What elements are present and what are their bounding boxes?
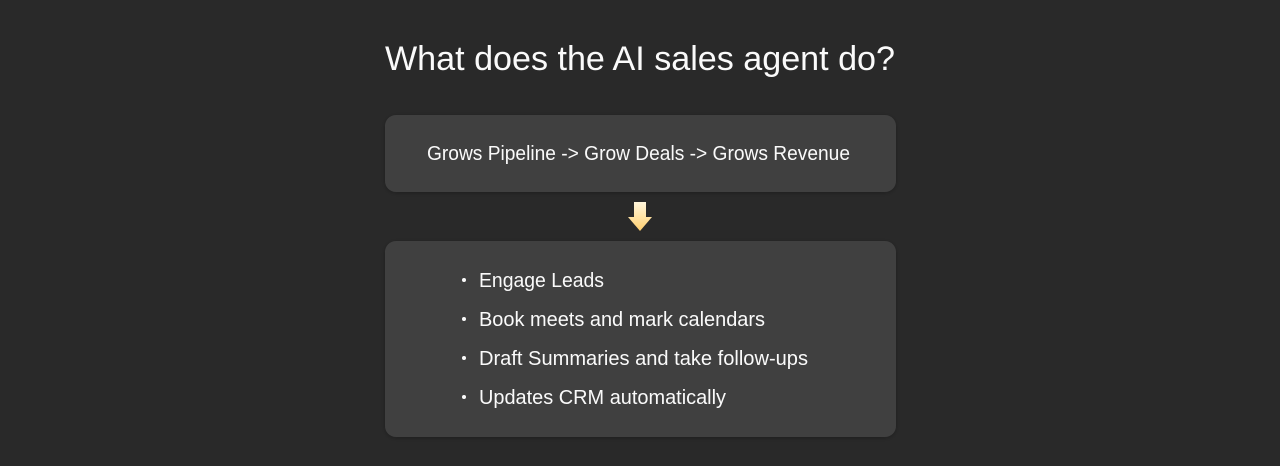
panel: agent tasks bbox=[385, 241, 896, 437]
list item: engage leads: Engage Leads bbox=[479, 270, 604, 292]
list item: updates CRM: Updates CRM automatically bbox=[479, 387, 726, 409]
title: What does the AI sales agent do? bbox=[385, 40, 895, 78]
list item: book meets: Book meets and mark calendars bbox=[479, 309, 765, 331]
icon: down arrow bbox=[628, 202, 652, 231]
panel: outcome flow bbox=[385, 115, 896, 192]
panel background: agent tasks bbox=[385, 241, 896, 437]
list item: draft summaries: Draft Summaries and take follow-ups bbox=[479, 348, 808, 370]
panel background: outcome flow bbox=[385, 115, 896, 192]
text: growth flow: Grows Pipeline -> Grow Deals -> Grows Revenue bbox=[427, 143, 850, 165]
